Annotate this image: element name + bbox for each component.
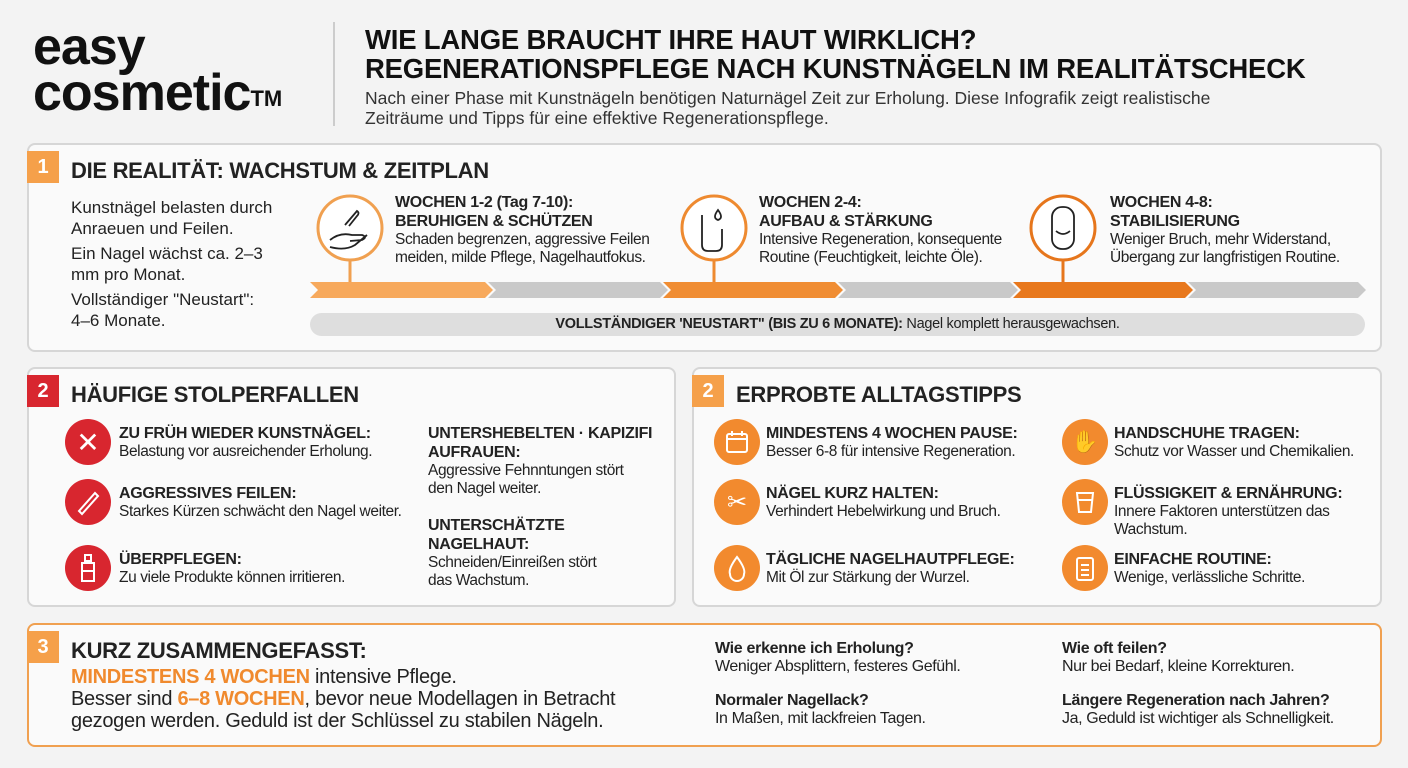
phase 3 text: STABILISIERUNG: [1110, 213, 1240, 230]
tip: Besser 6-8 für intensive Regeneration.: [766, 443, 1015, 460]
faq left: Wie erkenne ich Erholung?: [715, 640, 914, 657]
tip: [714, 545, 1014, 591]
item: Zu viele Produkte können irritieren.: [119, 569, 345, 586]
phase 2 text: AUFBAU & STÄRKUNG: [759, 213, 933, 230]
subtitle: [365, 88, 1210, 128]
tip: TÄGLICHE NAGELHAUTPFLEGE:: [766, 551, 1014, 568]
tip: [1062, 419, 1354, 465]
heading: ERPROBTE ALLTAGSTIPPS: [736, 382, 1021, 407]
heading: KURZ ZUSAMMENGEFASST:: [71, 638, 367, 663]
summary text: gezogen werden. Geduld ist der Schlüssel zu stabilen Nägeln.: [71, 710, 603, 732]
tip: EINFACHE ROUTINE:: [1114, 551, 1272, 568]
tip: HANDSCHUHE TRAGEN:: [1114, 425, 1300, 442]
faq left: Weniger Absplittern, festeres Gefühl.: [715, 658, 960, 675]
left text: [71, 198, 272, 330]
tip: FLÜSSIGKEIT & ERNÄHRUNG:: [1114, 485, 1342, 502]
badge 1: 1: [37, 156, 49, 178]
title: WIE LANGE BRAUCHT IHRE HAUT WIRKLICH?: [365, 24, 976, 55]
tip: ✂: [727, 488, 747, 516]
tip: Wenige, verlässliche Schritte.: [1114, 569, 1305, 586]
badge 2: 2: [37, 380, 49, 402]
tip: Innere Faktoren unterstützen das: [1114, 503, 1330, 520]
logo: [33, 18, 282, 122]
item: ZU FRÜH WIEDER KUNSTNÄGEL:: [119, 425, 371, 442]
left text: Kunstnägel belasten durch: [71, 198, 272, 217]
heading: DIE REALITÄT: WACHSTUM & ZEITPLAN: [71, 158, 489, 183]
left text: 4–6 Monate.: [71, 311, 166, 330]
phase 1 text: WOCHEN 1-2 (Tag 7-10):: [395, 194, 573, 211]
logo: cosmeticTM: [33, 64, 282, 122]
faq right: [1062, 640, 1334, 727]
summary text: [71, 666, 616, 732]
panel: zusammenfassung: [27, 623, 1382, 747]
panel: realitaet: [27, 143, 1382, 352]
faq left: Normaler Nagellack?: [715, 692, 868, 709]
item: ✕: [76, 426, 100, 458]
right column: UNTERSHEBELTEN · KAPIZIFI: [428, 425, 652, 442]
item: [65, 545, 345, 591]
badge 1: [27, 151, 59, 183]
item: ÜBERPFLEGEN:: [119, 551, 242, 568]
faq right: Nur bei Bedarf, kleine Korrekturen.: [1062, 658, 1294, 675]
tip: Mit Öl zur Stärkung der Wurzel.: [766, 569, 970, 586]
panel: stolperfallen: [27, 367, 676, 607]
right column: Aggressive Fehnntungen stört: [428, 462, 624, 479]
logo: easy: [33, 18, 145, 76]
right column: den Nagel weiter.: [428, 480, 541, 497]
heading: HÄUFIGE STOLPERFALLEN: [71, 382, 359, 407]
title: [365, 24, 1306, 84]
badge 2: 2: [702, 380, 714, 402]
timeline: [310, 194, 1366, 298]
phase 2 text: WOCHEN 2-4:: [759, 194, 861, 211]
right column: NAGELHAUT:: [428, 536, 529, 553]
faq right: Wie oft feilen?: [1062, 640, 1167, 657]
subtitle: Zeiträume und Tipps für eine effektive Regenerationspflege.: [365, 108, 829, 128]
tip: [1062, 545, 1305, 591]
right column: das Wachstum.: [428, 572, 529, 589]
phase 2 text: Routine (Feuchtigkeit, leichte Öle).: [759, 249, 982, 266]
left text: mm pro Monat. Vollständiger "Neustart":: [71, 265, 254, 309]
phase 1 text: BERUHIGEN & SCHÜTZEN: [395, 213, 593, 230]
summary text: MINDESTENS 4 WOCHEN intensive Pflege.: [71, 666, 457, 688]
phase 1 text: Schaden begrenzen, aggressive Feilen: [395, 231, 649, 248]
faq right: Längere Regeneration nach Jahren?: [1062, 692, 1330, 709]
neustart bar: [310, 313, 1365, 336]
subtitle: Nach einer Phase mit Kunstnägeln benötigen Naturnägel Zeit zur Erholung. Diese Infografik zeigt realistische: [365, 88, 1210, 108]
right column: [428, 425, 652, 589]
phase 2 text: [759, 194, 1002, 266]
item: [65, 419, 372, 465]
badge 3: [27, 631, 59, 663]
tip: [714, 479, 1001, 525]
faq right: Ja, Geduld ist wichtiger als Schnelligkeit.: [1062, 710, 1334, 727]
right column: UNTERSCHÄTZTE: [428, 517, 565, 534]
tip: Schutz vor Wasser und Chemikalien.: [1114, 443, 1354, 460]
phase 3 text: [1110, 194, 1340, 266]
title: REGENERATIONSPFLEGE NACH KUNSTNÄGELN IM REALITÄTSCHECK: [365, 53, 1306, 84]
panel: alltagstipps: Wachstum.: [1114, 521, 1187, 538]
badge 2: [27, 375, 59, 407]
item: Starkes Kürzen schwächt den Nagel weiter.: [119, 503, 402, 520]
phase 1 text: [395, 194, 649, 266]
item: Belastung vor ausreichender Erholung.: [119, 443, 372, 460]
phase 3 text: Übergang zur langfristigen Routine.: [1110, 249, 1340, 266]
tip: [714, 419, 1017, 465]
phase 3 text: Weniger Bruch, mehr Widerstand,: [1110, 231, 1331, 248]
panel: alltagstipps: [692, 367, 1382, 607]
right column: Schneiden/Einreißen stört: [428, 554, 596, 571]
left text: Anraeuen und Feilen. Ein Nagel wächst ca. 2–3: [71, 219, 263, 263]
tip: Verhindert Hebelwirkung und Bruch.: [766, 503, 1001, 520]
tip: MINDESTENS 4 WOCHEN PAUSE:: [766, 425, 1017, 442]
neustart bar: VOLLSTÄNDIGER 'NEUSTART" (BIS ZU 6 MONATE): Nagel komplett herausgewachsen.: [555, 316, 1120, 332]
phase 2 text: Intensive Regeneration, konsequente: [759, 231, 1002, 248]
phase 3 text: WOCHEN 4-8:: [1110, 194, 1212, 211]
tip: ✋: [1071, 429, 1099, 454]
item: [65, 479, 402, 525]
phase 1 text: meiden, milde Pflege, Nagelhautfokus.: [395, 249, 646, 266]
right column: AUFRAUEN:: [428, 444, 520, 461]
tip: [1062, 479, 1342, 538]
summary text: Besser sind 6–8 WOCHEN, bevor neue Modellagen in Betracht: [71, 688, 615, 710]
faq left: [715, 640, 960, 727]
tip: NÄGEL KURZ HALTEN:: [766, 485, 939, 502]
item: AGGRESSIVES FEILEN:: [119, 485, 296, 502]
faq left: In Maßen, mit lackfreien Tagen.: [715, 710, 926, 727]
badge 2: [692, 375, 724, 407]
badge 3: 3: [37, 636, 49, 658]
